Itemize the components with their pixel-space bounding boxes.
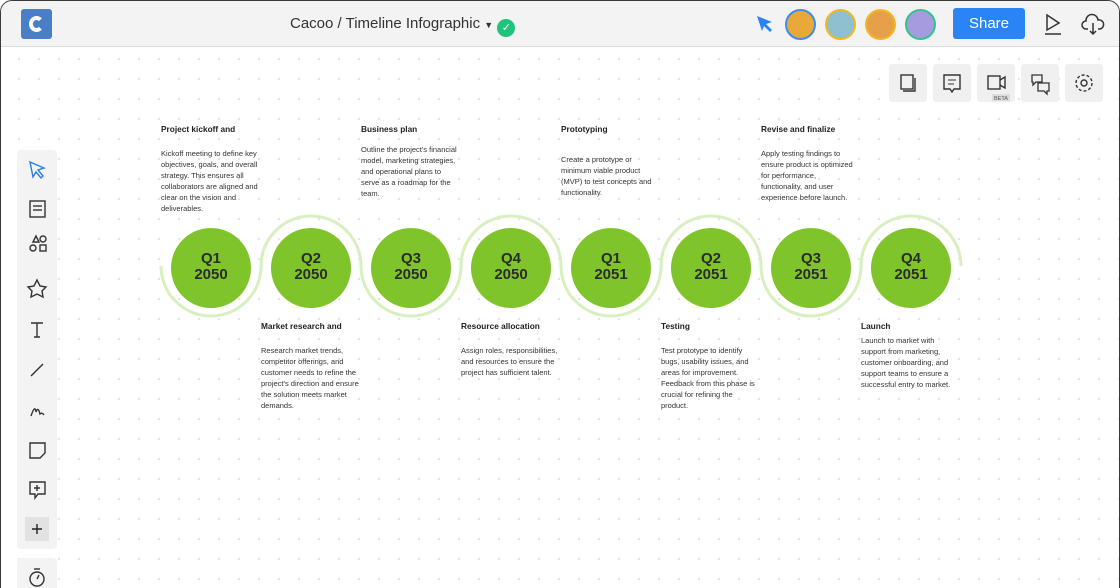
- text: prototyping: (MVP) to test concepts and: [561, 177, 651, 186]
- document title: Cacoo / Timeline Infographic ▼: [290, 15, 493, 32]
- text: testing: [661, 321, 755, 410]
- header bar: [1, 1, 1120, 47]
- text: testing: Testing: [661, 321, 690, 331]
- text: project kickoff: Project kickoff and: [161, 124, 235, 134]
- text: revise and finalize: [761, 124, 853, 202]
- share button: Share: [969, 15, 1009, 32]
- text: launch: customer onboarding, and: [861, 358, 948, 367]
- milestone circles: 2051: [894, 266, 928, 283]
- play icon: [1045, 14, 1061, 35]
- text: market research: customer needs to refine the: [261, 368, 356, 377]
- text: business plan: team.: [361, 189, 380, 198]
- text: project kickoff: deliverables.: [161, 204, 203, 213]
- text: prototyping: Create a prototype or: [561, 155, 632, 164]
- text: launch: Launch: [861, 321, 891, 331]
- text: prototyping: minimum viable product: [561, 166, 640, 175]
- text: launch: [861, 321, 950, 389]
- text: market research: Research market trends,: [261, 346, 343, 355]
- text: business plan: Outline the project's financial: [361, 145, 457, 154]
- text: market research: demands.: [261, 401, 294, 410]
- download icon: [1081, 14, 1104, 35]
- milestone circles: Q3: [801, 250, 821, 267]
- text: resource allocation: Assign roles, responsibilities,: [461, 346, 557, 355]
- milestone circles: [171, 228, 951, 308]
- text: market research: project's direction and ensure: [261, 379, 359, 388]
- text: testing: Feedback from this phase is: [661, 379, 755, 388]
- text: project kickoff: [161, 124, 258, 213]
- text: prototyping: [561, 124, 651, 197]
- text: revise and finalize: for performance,: [761, 171, 816, 180]
- milestone circles: Q2: [701, 250, 721, 267]
- text: project kickoff: Kickoff meeting to define key: [161, 149, 257, 158]
- text: project kickoff: collaborators are aligned and: [161, 182, 258, 191]
- text: market research: competitor offerings, and: [261, 357, 343, 366]
- text: BETA: [994, 96, 1008, 102]
- milestone circles: Q4: [501, 250, 522, 267]
- milestone circles: Q4: [901, 250, 922, 267]
- milestone circles: 2051: [594, 266, 628, 283]
- document title: ✓: [502, 22, 511, 34]
- text: business plan: [361, 124, 457, 198]
- milestone circles: 2051: [794, 266, 828, 283]
- left toolbar: [17, 150, 57, 549]
- text: testing: product.: [661, 401, 688, 410]
- text: launch: support teams to ensure a: [861, 369, 948, 378]
- text: business plan: model, marketing strategies,: [361, 156, 455, 165]
- text: resource allocation: project has sufficient talent.: [461, 368, 552, 377]
- milestone circles: 2050: [394, 266, 428, 283]
- timer panel: [17, 558, 57, 588]
- text: market research: Market research and: [261, 321, 342, 331]
- text: market research: [261, 321, 359, 410]
- milestone circles: Q3: [401, 250, 421, 267]
- text: testing: bugs, usability issues, and: [661, 357, 749, 366]
- text: revise and finalize: Revise and finalize: [761, 124, 835, 134]
- logo: [21, 9, 52, 39]
- text: business plan: serve as a roadmap for the: [361, 178, 451, 187]
- text: project kickoff: strategy. This ensures all: [161, 171, 244, 180]
- text: launch: support from marketing,: [861, 347, 940, 356]
- wave line: [161, 216, 961, 316]
- milestone circles: 2050: [494, 266, 528, 283]
- text: resource allocation: [461, 321, 557, 377]
- text: revise and finalize: functionality, and user: [761, 182, 833, 191]
- text: testing: areas for improvement.: [661, 368, 738, 377]
- text: revise and finalize: Apply testing findings to: [761, 149, 840, 158]
- text: revise and finalize: ensure product is optimized: [761, 160, 853, 169]
- text: business plan: and operational plans to: [361, 167, 441, 176]
- text: resource allocation: Resource allocation: [461, 321, 540, 331]
- text: prototyping: functionality.: [561, 188, 602, 197]
- avatars: [785, 9, 936, 40]
- right tool buttons: [889, 64, 1103, 102]
- text: project kickoff: clear on the vision and: [161, 193, 236, 202]
- milestone circles: 2050: [194, 266, 228, 283]
- milestone circles: Q1: [201, 250, 221, 267]
- text: testing: Test prototype to identify: [661, 346, 742, 355]
- text: project kickoff: objectives, goals, and overall: [161, 160, 257, 169]
- share button: [953, 8, 1025, 39]
- text: business plan: Business plan: [361, 124, 417, 134]
- milestone circles: 2050: [294, 266, 328, 283]
- text: launch: Launch to market with: [861, 336, 934, 345]
- text: market research: the solution meets market: [261, 390, 347, 399]
- text: launch: successful entry to market.: [861, 380, 950, 389]
- milestone circles: 2051: [694, 266, 728, 283]
- text: resource allocation: and resources to ensure the: [461, 357, 554, 366]
- milestone circles: Q2: [301, 250, 321, 267]
- text: revise and finalize: experience before launch.: [761, 193, 847, 202]
- document title: [290, 15, 515, 37]
- text: prototyping: Prototyping: [561, 124, 608, 134]
- text: testing: crucial for refining the: [661, 390, 733, 399]
- milestone circles: Q1: [601, 250, 621, 267]
- cursor icon: [757, 16, 772, 32]
